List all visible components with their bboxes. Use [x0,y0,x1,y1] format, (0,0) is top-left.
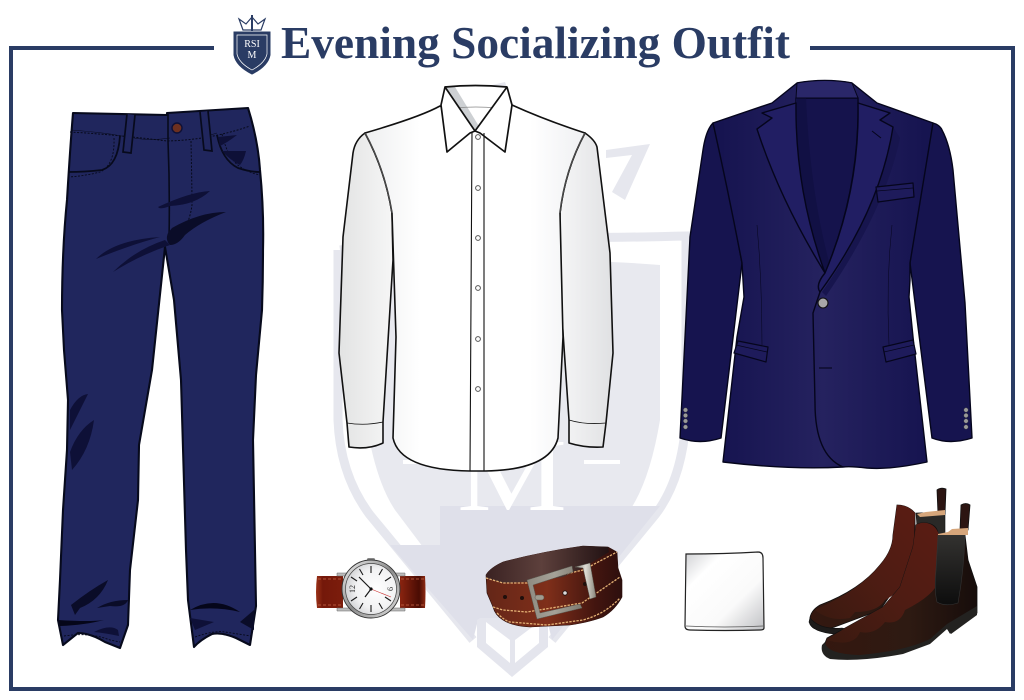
belt stitching [486,552,620,625]
blazer body [713,80,933,468]
boot elastic gore [935,535,965,605]
icon: logo crest [234,15,270,74]
watermark shield [338,82,686,677]
chelsea boots [809,488,977,660]
shirt placket [470,132,484,471]
boot sole [822,606,977,660]
blazer lapels [757,103,825,273]
back boot [809,505,945,634]
watermark shield: M [457,418,567,533]
watch case and dial [342,560,400,618]
jeans waistband and seams [64,111,261,642]
heading [234,15,791,74]
blazer button [818,298,828,308]
icon: logo crest: RSI [244,39,260,50]
front boot [822,523,977,660]
belt inner surface [486,546,609,583]
blazer sleeve buttons [683,408,968,429]
shirt sleeves [339,133,393,448]
wristwatch: 12 [348,585,357,593]
jeans [58,108,263,648]
navy blazer [680,80,972,468]
shirt buttons [476,135,480,391]
blazer lapel shadow [822,127,900,296]
icon: logo crest: M [248,50,257,61]
white pocket square [685,552,764,630]
wristwatch: 6 [386,587,395,591]
blazer inner lining [796,98,858,273]
white dress shirt [339,86,613,471]
belt holes [503,582,587,600]
jeans button [172,123,182,133]
shirt body [365,105,585,471]
blazer sleeves [680,123,742,442]
jeans shading folds [58,135,254,636]
blazer pockets [876,183,914,202]
boot pull tabs [937,488,946,514]
watch strap [316,576,343,608]
leather belt [486,546,622,627]
shirt collar [441,86,512,152]
title: Evening Socializing Outfit [281,17,791,68]
belt buckle [527,563,596,619]
wristwatch [316,558,426,618]
